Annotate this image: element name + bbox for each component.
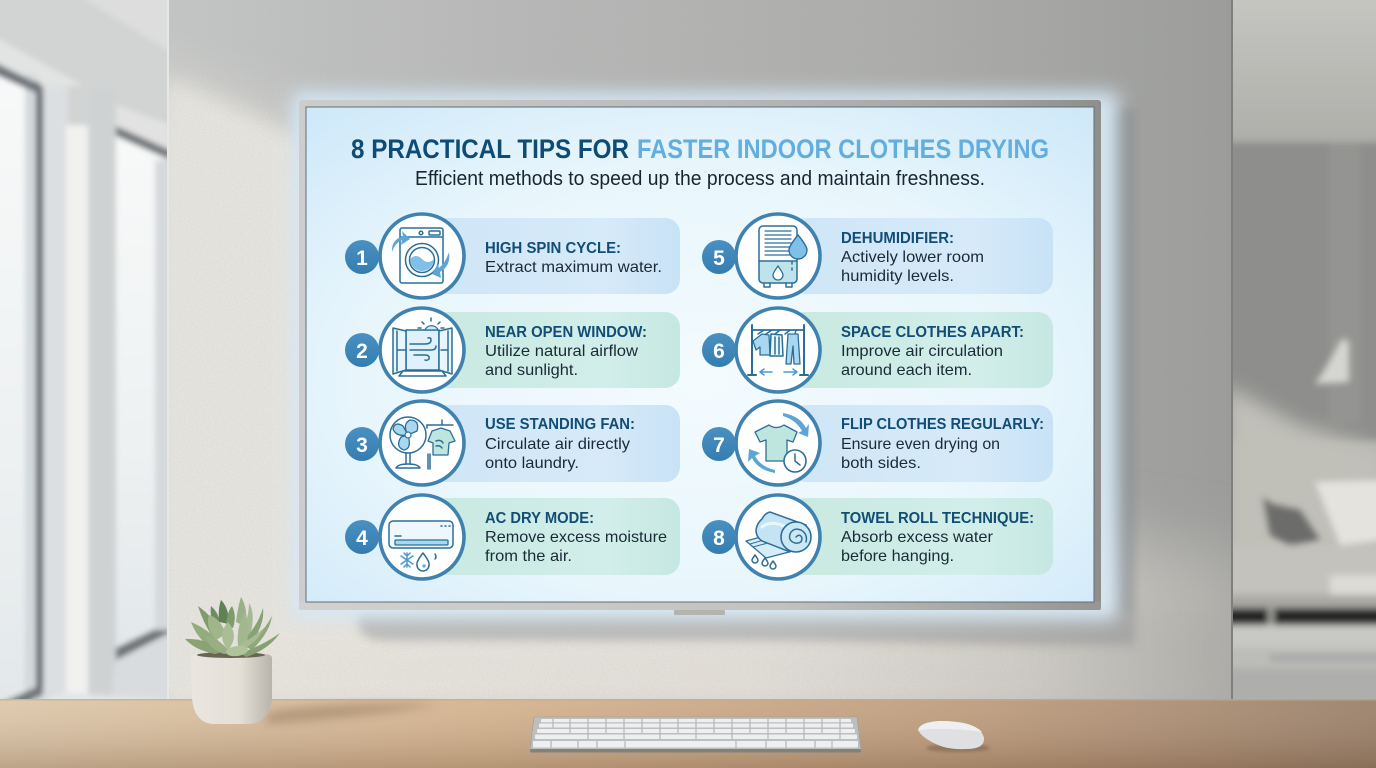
monitor xyxy=(299,100,1101,615)
tip 2 text: NEAR OPEN WINDOW: xyxy=(485,324,647,341)
tip 3 number badge: 3 xyxy=(356,434,368,457)
succulent leaves xyxy=(185,597,280,658)
tip 4 text: Remove excess moisture xyxy=(485,529,667,546)
tip 7 text: Ensure even drying on xyxy=(841,436,1000,453)
tip 3: use standing fan xyxy=(345,401,680,485)
tip 3 icon circle xyxy=(380,401,464,485)
pot xyxy=(191,654,272,724)
tip 8 card xyxy=(790,498,1053,575)
tip 7 number badge: 7 xyxy=(713,434,725,457)
icon: rolled towel xyxy=(746,512,811,569)
background: main wall xyxy=(140,0,1260,720)
desk surface xyxy=(0,699,1376,768)
tip 2: near open window xyxy=(345,308,680,392)
tip 3 text: USE STANDING FAN: xyxy=(485,416,635,433)
monitor bezel xyxy=(299,100,1101,610)
title: FASTER INDOOR CLOTHES DRYING xyxy=(637,134,1049,164)
tip 6 text: around each item. xyxy=(841,362,972,379)
tip 8 text: before hanging. xyxy=(841,548,954,565)
title xyxy=(351,134,1049,164)
screen panel xyxy=(306,107,1094,602)
tip 7 icon circle xyxy=(736,401,820,485)
tip 3 number badge xyxy=(345,427,379,461)
tip 5 card xyxy=(790,218,1053,294)
tip 7 text: FLIP CLOTHES REGULARLY: xyxy=(841,416,1044,433)
icon: dehumidifier xyxy=(759,226,807,287)
tip 6 icon circle xyxy=(736,308,820,392)
monitor stand tab xyxy=(674,610,725,615)
tip 6 number badge: 6 xyxy=(713,340,725,363)
tip 3 text: Circulate air directly xyxy=(485,436,630,453)
tip 8 icon circle xyxy=(736,495,820,579)
tip 2 text: Utilize natural airflow xyxy=(485,343,638,360)
tip 8 number badge xyxy=(702,520,736,554)
tip 4 number badge xyxy=(345,520,379,554)
tip 6 text xyxy=(841,324,1024,379)
tip 8 text xyxy=(841,510,1034,565)
tip 4 text xyxy=(485,510,667,565)
keyboard key rows xyxy=(533,719,858,748)
tip 7 number badge xyxy=(702,427,736,461)
tip 4 card xyxy=(430,498,680,575)
tip 5 text: DEHUMIDIFIER: xyxy=(841,230,954,247)
tip 2 card xyxy=(430,312,680,388)
icon: open window xyxy=(393,318,452,376)
tip 7 card xyxy=(790,405,1053,482)
tip 8 text: TOWEL ROLL TECHNIQUE: xyxy=(841,510,1034,527)
tip 3 text: onto laundry. xyxy=(485,455,579,472)
tip 6 text: SPACE CLOTHES APART: xyxy=(841,324,1024,341)
tip 5 number badge: 5 xyxy=(713,247,725,270)
tip 1 text xyxy=(485,240,662,276)
potted succulent xyxy=(185,597,440,724)
tip 8 text: Absorb excess water xyxy=(841,529,994,546)
tip 5 icon circle xyxy=(736,214,820,298)
tip 5 text: Actively lower room xyxy=(841,249,984,266)
plant shadow on desk xyxy=(265,704,440,724)
tip 1 text: Extract maximum water. xyxy=(485,259,662,276)
icon: shirt with arrows and clock xyxy=(748,413,809,473)
background: right room with sofa and lamp xyxy=(1225,0,1376,705)
tip 4 number badge: 4 xyxy=(356,527,368,550)
mouse xyxy=(918,721,990,752)
title: 8 PRACTICAL TIPS FOR xyxy=(351,134,629,164)
tip 2 text xyxy=(485,324,647,379)
tip 1: high spin cycle xyxy=(345,214,680,298)
icon: air conditioner xyxy=(389,521,453,571)
icon: washing machine xyxy=(392,228,449,283)
background: left room with windows xyxy=(0,0,167,699)
tip 1 number badge: 1 xyxy=(356,247,368,270)
right room cream wall patch xyxy=(1233,383,1376,544)
monitor shadow on wall xyxy=(358,612,1135,645)
tip 5 number badge xyxy=(702,240,736,274)
tip 5: dehumidifier xyxy=(702,214,1053,298)
tip 7 text xyxy=(841,416,1044,472)
tip 3 text xyxy=(485,416,635,472)
tip 6 number badge xyxy=(702,333,736,367)
tip 1 icon circle xyxy=(380,214,464,298)
tip 2 text: and sunlight. xyxy=(485,362,578,379)
tip 6 card xyxy=(790,312,1053,388)
tip 2 icon circle xyxy=(380,308,464,392)
tip 4 icon circle xyxy=(380,495,464,579)
tip 5 text: humidity levels. xyxy=(841,268,954,285)
tip 7 text: both sides. xyxy=(841,455,921,472)
tip 6 text: Improve air circulation xyxy=(841,343,1003,360)
tip 1 number badge xyxy=(345,240,379,274)
tip 5 text xyxy=(841,230,984,285)
tip 3 card xyxy=(430,405,680,482)
tip 2 number badge: 2 xyxy=(356,340,368,363)
tip 1 card xyxy=(430,218,680,294)
tip 8 number badge: 8 xyxy=(713,527,725,550)
monitor backlight glow xyxy=(292,92,1118,620)
tip 2 number badge xyxy=(345,333,379,367)
tip 4 text: from the air. xyxy=(485,548,572,565)
tip 7: flip clothes regularly xyxy=(702,401,1053,485)
tip 8: towel roll technique xyxy=(702,495,1053,579)
tip 4: ac dry mode xyxy=(345,495,680,579)
icon: standing fan and shirt xyxy=(390,417,455,469)
keyboard xyxy=(530,717,861,752)
keyboard key gaps xyxy=(551,719,840,748)
subtitle: Efficient methods to speed up the process and maintain freshness. xyxy=(415,168,985,190)
tip 6: space clothes apart xyxy=(702,308,1053,392)
icon: clothes rack xyxy=(748,325,808,375)
tip 1 text: HIGH SPIN CYCLE: xyxy=(485,240,621,257)
monitor right-side shadow xyxy=(1112,108,1134,613)
tip 4 text: AC DRY MODE: xyxy=(485,510,594,527)
